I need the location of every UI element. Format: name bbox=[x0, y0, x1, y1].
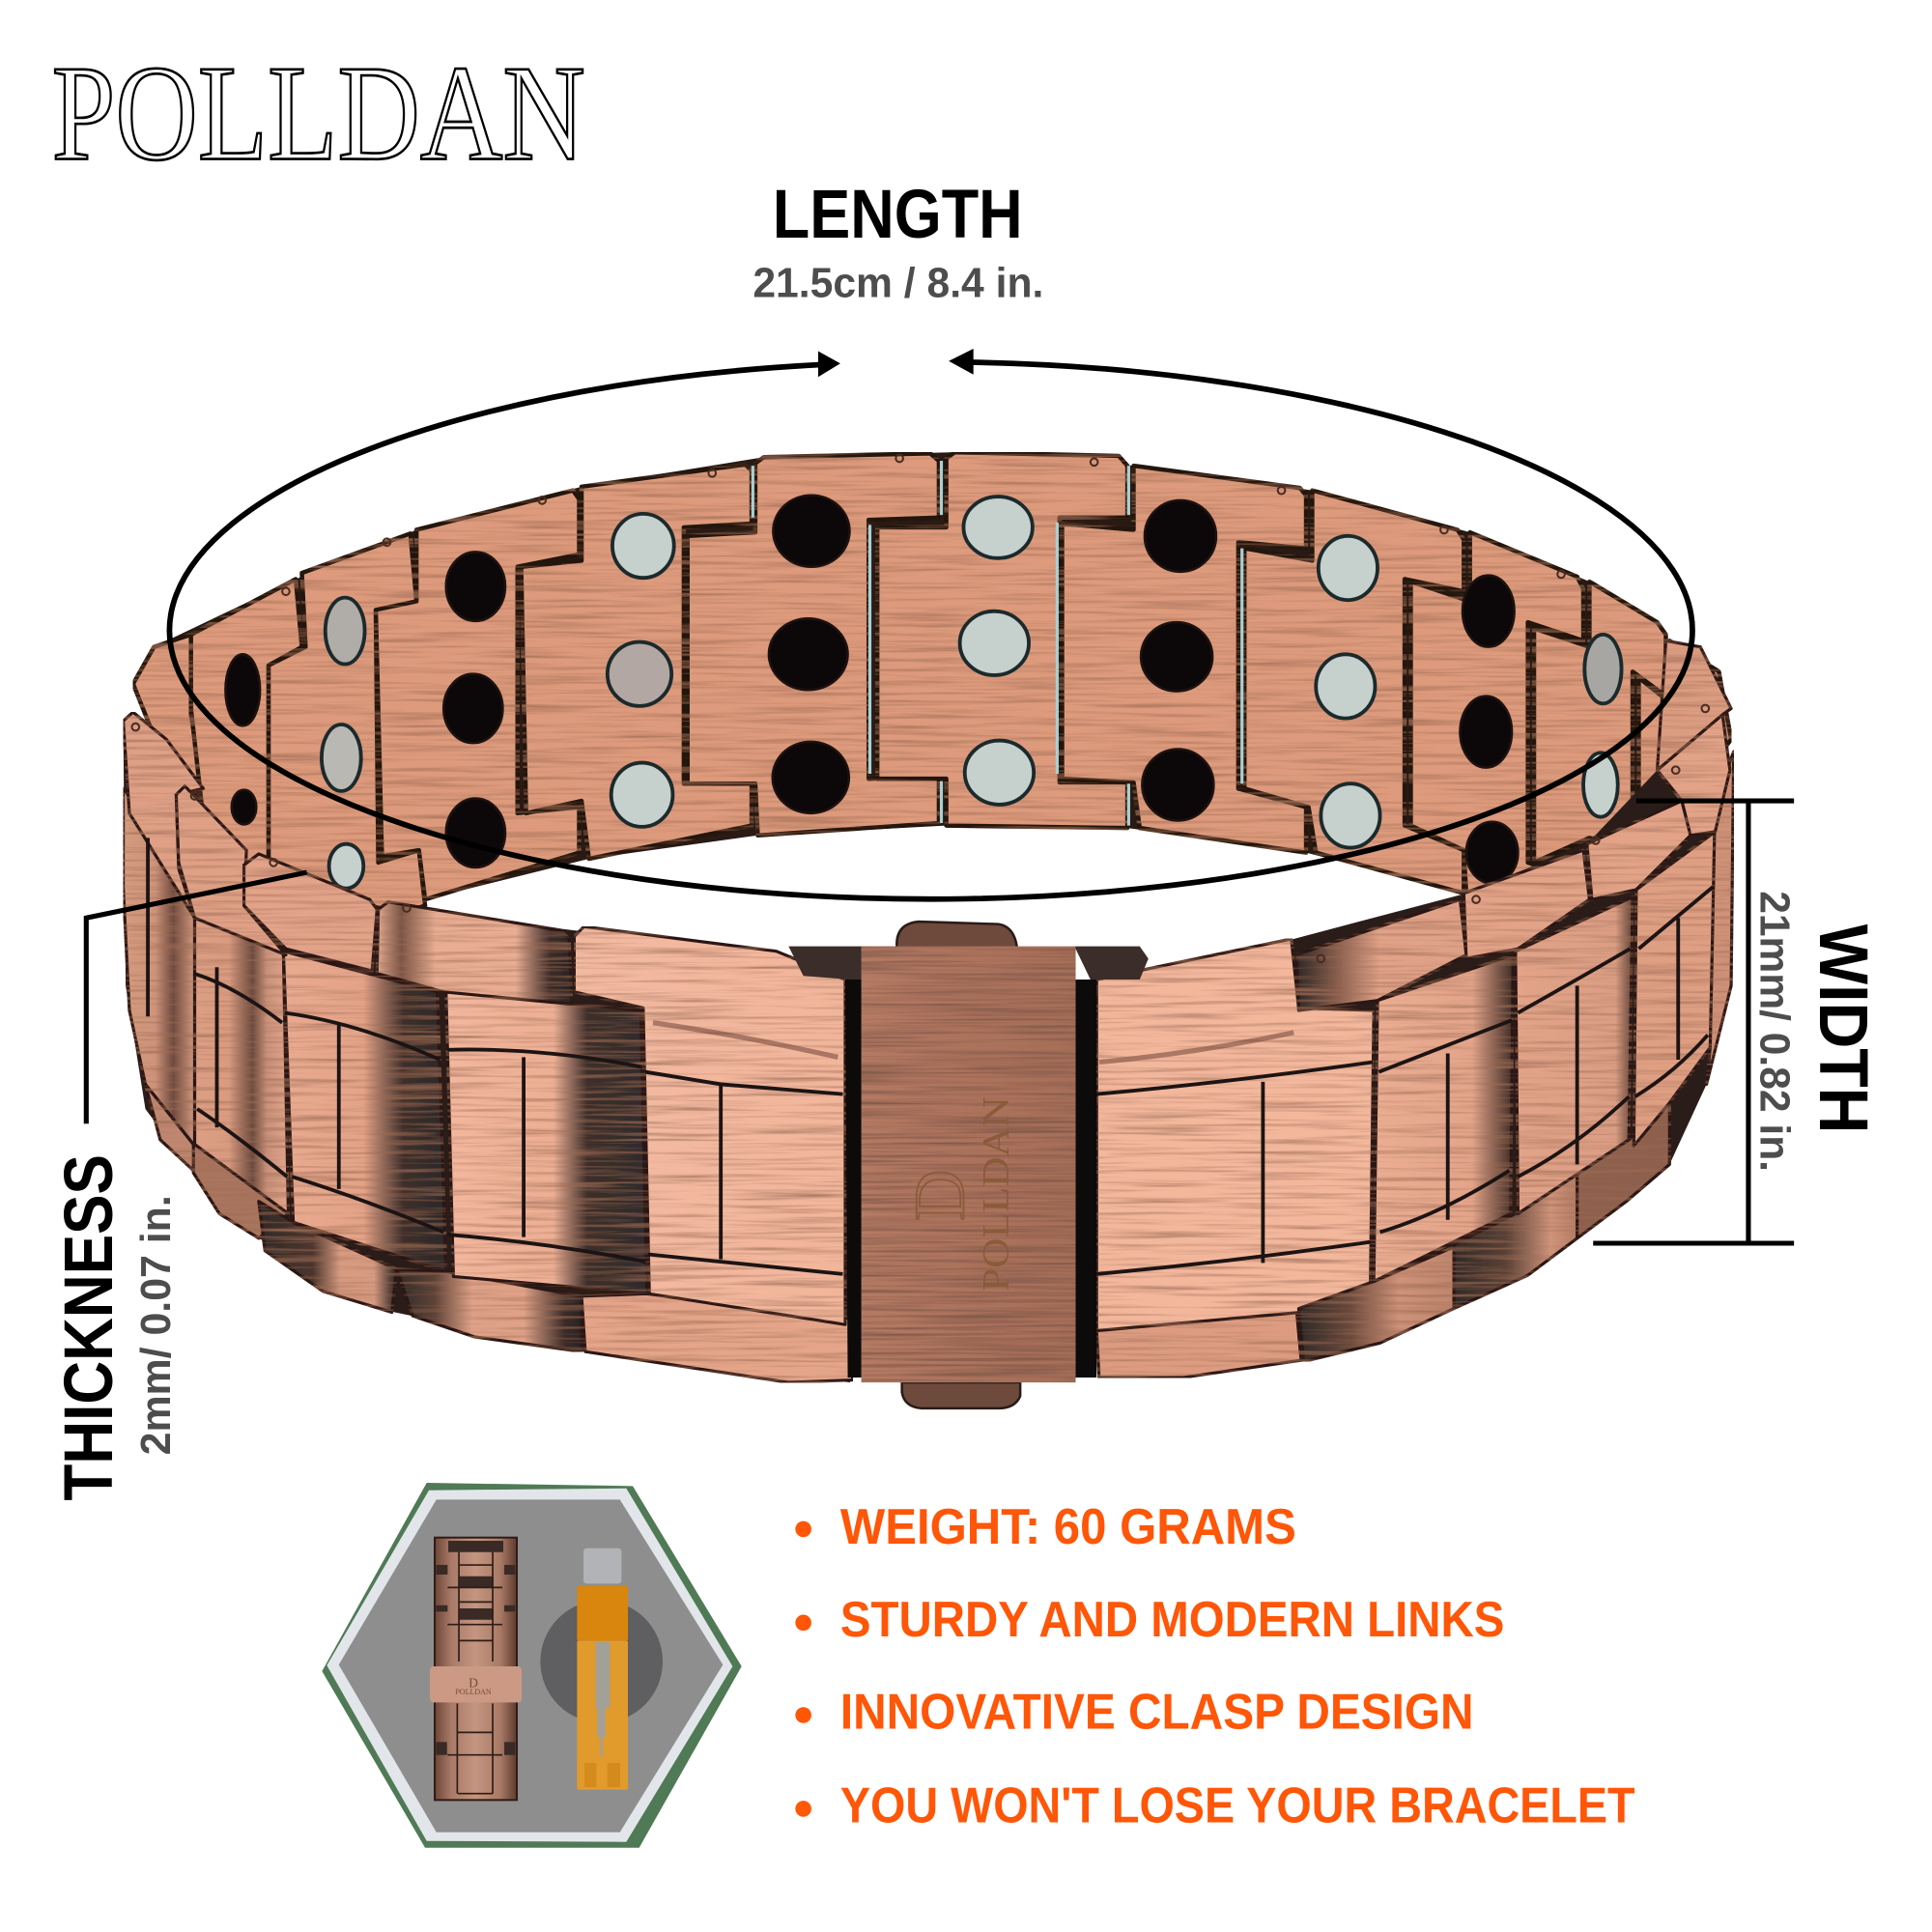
bullet: security: YOU WON'T LOSE YOUR BRACELET bbox=[840, 1777, 1635, 1833]
box green outer bbox=[322, 1483, 742, 1848]
tool recess bbox=[540, 1601, 663, 1722]
pin holes on outer links bbox=[131, 705, 1709, 962]
mini clasp bbox=[430, 1666, 522, 1702]
inner link plates bbox=[133, 452, 1731, 936]
side hinge pins bbox=[788, 947, 1149, 980]
tool grey knob bbox=[583, 1548, 621, 1583]
bullet: links: STURDY AND MODERN LINKS bbox=[840, 1592, 1504, 1648]
circumference arrow: length bbox=[169, 349, 1692, 899]
silver magnets bbox=[322, 497, 1622, 889]
center-left link bbox=[574, 926, 853, 1382]
center-right grooves bbox=[1096, 1033, 1373, 1274]
elliptical arc bbox=[169, 362, 1692, 899]
logo: POLLDAN wordmark: POLLDAN bbox=[52, 38, 585, 189]
left front links bbox=[124, 712, 647, 1351]
inner band shadow underlay bbox=[133, 452, 1731, 936]
link removal tool bbox=[577, 1548, 628, 1790]
clasp gaps bbox=[845, 980, 1096, 1378]
box grey foam insert bbox=[339, 1499, 723, 1833]
feature list bbox=[795, 1499, 1635, 1833]
arrowhead left bbox=[818, 352, 840, 377]
clasp engraved logo mark: D bbox=[900, 1170, 980, 1221]
length label: LENGTH bbox=[773, 176, 1023, 253]
mini dark link shading bbox=[436, 1541, 515, 1755]
pin holes on inner links bbox=[282, 455, 1565, 595]
heading: length bbox=[753, 176, 1043, 306]
center-left grooves bbox=[645, 1023, 842, 1274]
tool screw bbox=[596, 1642, 610, 1756]
mini clasp wordmark: POLLDAN bbox=[455, 1688, 492, 1696]
clasp engraved wordmark: POLLDAN bbox=[974, 1096, 1016, 1292]
black magnets bbox=[225, 496, 1518, 884]
right front links bbox=[1296, 640, 1734, 1361]
box white rim bbox=[327, 1489, 732, 1842]
width value: 21mm/ 0.82 in. bbox=[1751, 891, 1798, 1172]
bracelet inner links (back of band) bbox=[133, 452, 1731, 936]
thickness value: 2mm/ 0.07 in. bbox=[133, 1195, 180, 1455]
tool orange base bbox=[577, 1640, 628, 1790]
mini bracelet bbox=[430, 1538, 522, 1800]
gift box: hexagonal case with bracelet and tool bbox=[322, 1483, 742, 1848]
mini link lines bbox=[447, 1552, 502, 1794]
thickness heading: THICKNESS bbox=[50, 1154, 128, 1501]
left front link grooves bbox=[148, 838, 645, 1262]
tool orange barrel bbox=[577, 1586, 628, 1640]
width heading: WIDTH bbox=[1804, 924, 1882, 1133]
right front link grooves bbox=[1378, 887, 1713, 1233]
clasp top and bottom catch bbox=[896, 922, 1020, 1408]
width bracket bbox=[1593, 801, 1794, 1243]
tool feet bbox=[584, 1763, 620, 1787]
mini band bbox=[435, 1538, 517, 1800]
width label bbox=[1751, 891, 1882, 1172]
bracelet photo illustration bbox=[124, 452, 1734, 1408]
center-right link bbox=[1096, 939, 1374, 1378]
clasp bbox=[788, 922, 1149, 1408]
bullet: clasp: INNOVATIVE CLASP DESIGN bbox=[840, 1685, 1474, 1741]
clasp cover bbox=[862, 947, 1076, 1382]
length value: 21.5cm / 8.4 in. bbox=[753, 260, 1043, 306]
outer band shadow underlay bbox=[124, 715, 1734, 1382]
mini clasp mark: D bbox=[469, 1676, 478, 1690]
bracelet outer links (front of band) bbox=[124, 640, 1734, 1408]
bullet: weight: WEIGHT: 60 GRAMS bbox=[840, 1499, 1296, 1555]
magnet rivets bbox=[225, 496, 1622, 889]
arrowhead right bbox=[949, 349, 974, 375]
thickness leader line bbox=[86, 872, 307, 1123]
thickness label bbox=[50, 1154, 180, 1501]
teal gap highlights bbox=[753, 461, 1242, 826]
